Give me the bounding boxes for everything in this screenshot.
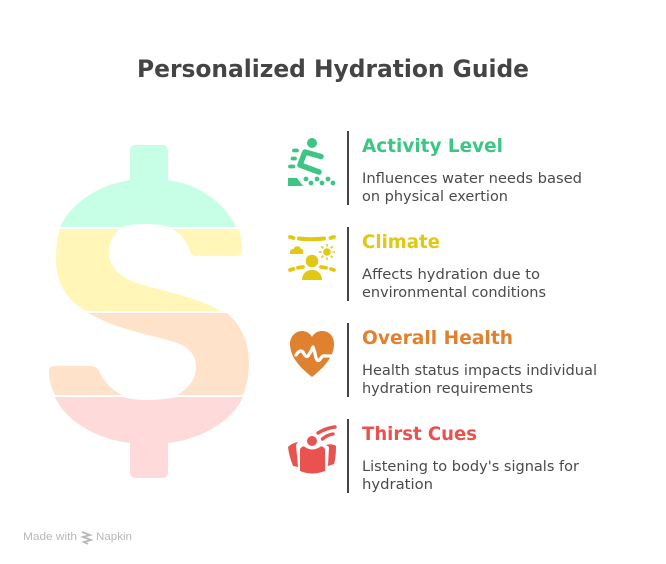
item: activity level bbox=[288, 131, 582, 205]
heading: Activity Level bbox=[362, 135, 503, 157]
icon: climate bbox=[290, 237, 334, 280]
dollar band: green bbox=[60, 145, 236, 227]
description: hydration bbox=[362, 477, 433, 493]
heading: Overall Health bbox=[362, 327, 513, 349]
divider bbox=[347, 323, 349, 397]
description: hydration requirements bbox=[362, 381, 533, 397]
divider bbox=[347, 227, 349, 301]
icon: napkin logo bbox=[82, 532, 91, 544]
footer: made with napkin: Made with bbox=[23, 531, 77, 543]
description: Health status impacts individual bbox=[362, 363, 597, 379]
description: Influences water needs based bbox=[362, 171, 582, 187]
footer: made with napkin: Napkin bbox=[96, 531, 132, 543]
item: thirst cues bbox=[288, 419, 579, 493]
description: environmental conditions bbox=[362, 285, 546, 301]
icon: heart with pulse bbox=[290, 331, 335, 377]
icon: thirst cues bbox=[288, 427, 336, 474]
icon: runner bbox=[288, 138, 335, 186]
footer: made with napkin bbox=[23, 531, 132, 544]
description: on physical exertion bbox=[362, 189, 508, 205]
heading: Climate bbox=[362, 231, 440, 253]
divider bbox=[347, 131, 349, 205]
heading: Thirst Cues bbox=[362, 423, 477, 445]
dollar band: yellow bbox=[56, 229, 242, 311]
dollar sign graphic bbox=[49, 145, 249, 478]
description: Listening to body's signals for bbox=[362, 459, 579, 475]
item: climate bbox=[290, 227, 546, 301]
dollar band: orange bbox=[49, 313, 249, 395]
divider bbox=[347, 419, 349, 493]
dollar band: red bbox=[55, 397, 243, 478]
title: Personalized Hydration Guide bbox=[137, 55, 529, 83]
description: Affects hydration due to bbox=[362, 267, 540, 283]
item: overall health bbox=[290, 323, 597, 397]
